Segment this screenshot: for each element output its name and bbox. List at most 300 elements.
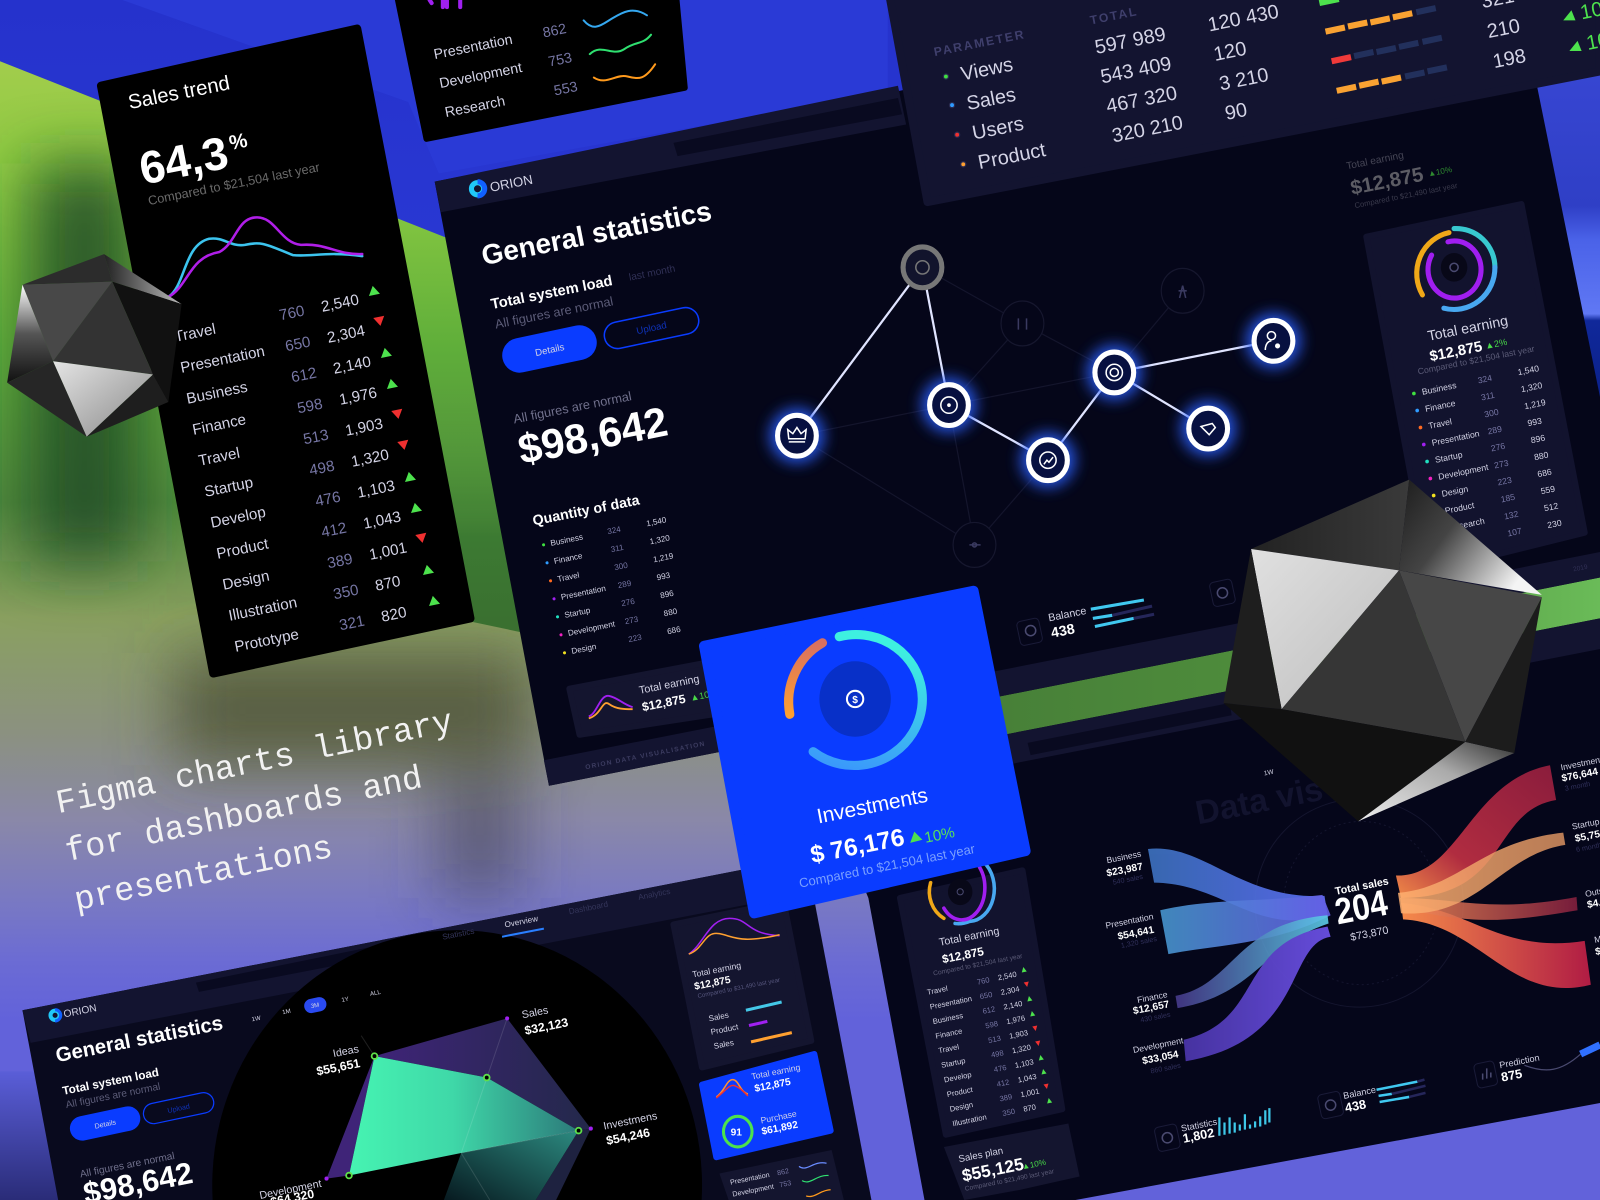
note: All figures are normal bbox=[494, 293, 614, 332]
table: 1,103 bbox=[356, 477, 396, 502]
table: Business bbox=[932, 1011, 964, 1026]
subheading: Total system load bbox=[61, 1066, 160, 1098]
table: Presentation bbox=[179, 343, 266, 377]
faded nodes bbox=[953, 268, 1204, 567]
sankey left bbox=[1148, 849, 1331, 1061]
footer text: ORION DATA VISUALISATION bbox=[585, 741, 706, 771]
table: Travel bbox=[926, 984, 949, 997]
compared: Compared to $31,490 last year bbox=[697, 977, 781, 1000]
table: Design bbox=[221, 568, 271, 594]
background: right margin bbox=[1520, 61, 1600, 408]
table: 598 bbox=[296, 396, 324, 417]
quantity table: 324 bbox=[607, 525, 622, 536]
table: Startup bbox=[203, 474, 255, 501]
heading: Total earning bbox=[1426, 313, 1509, 345]
table: 1,976 bbox=[338, 384, 378, 409]
table: 412 bbox=[996, 1077, 1010, 1089]
total sales rings bbox=[1255, 799, 1463, 1007]
table: 132 bbox=[1503, 509, 1519, 521]
last month: last month bbox=[628, 264, 676, 284]
legend: Sales bbox=[708, 1011, 730, 1023]
table: 289 bbox=[1487, 424, 1503, 436]
table: Design bbox=[1441, 484, 1469, 499]
label: Investments bbox=[815, 784, 930, 828]
gauge: 91 bbox=[731, 1128, 742, 1139]
quantity table: 223 bbox=[628, 633, 643, 644]
table: Business bbox=[1421, 380, 1458, 397]
sankey right bbox=[1396, 765, 1591, 988]
table: 230 bbox=[1546, 518, 1563, 530]
heading quantity: Quantity of data bbox=[531, 492, 642, 529]
top bar bbox=[22, 870, 747, 1043]
note 2: All figures are normal bbox=[79, 1151, 176, 1180]
top bar bbox=[435, 86, 906, 212]
total sales: $73,870 bbox=[1349, 924, 1390, 944]
deltas bbox=[1563, 0, 1600, 55]
polyhedron: right bbox=[1223, 480, 1542, 821]
tabs: Overview bbox=[504, 914, 539, 930]
table: 612 bbox=[982, 1004, 996, 1016]
amount: $12,875 bbox=[941, 945, 985, 966]
footer year: 2019 bbox=[1573, 564, 1589, 573]
faded total earning: $12,875 bbox=[1349, 164, 1425, 200]
table: 412 bbox=[320, 520, 348, 541]
button upload bbox=[142, 1091, 216, 1126]
table: 559 bbox=[1540, 484, 1556, 496]
line chart bbox=[168, 217, 362, 297]
glows bbox=[769, 313, 1301, 488]
background: dark green facet right of sales panel bbox=[388, 408, 571, 643]
quantity table: 880 bbox=[663, 607, 678, 618]
rows: 320 210 bbox=[1110, 112, 1185, 147]
table: Travel bbox=[173, 321, 217, 346]
rows: Product bbox=[976, 139, 1048, 174]
table: 1,903 bbox=[344, 415, 384, 440]
table: Finance bbox=[1424, 398, 1456, 414]
button upload bbox=[602, 305, 701, 351]
note: All figures are normal bbox=[65, 1082, 161, 1111]
table bbox=[173, 285, 442, 656]
table: Design bbox=[949, 1100, 974, 1114]
table: 1,103 bbox=[1014, 1057, 1034, 1070]
card delta: ▲10% bbox=[689, 688, 718, 703]
panel: sales trend bbox=[101, 29, 470, 673]
sankey labels left: 1,320 sales bbox=[1120, 935, 1158, 950]
percent sign: % bbox=[227, 130, 249, 155]
amount: $12,875 bbox=[693, 975, 732, 993]
sankey labels left: $33,054 bbox=[1141, 1049, 1180, 1067]
background: lighter facet bbox=[122, 0, 888, 173]
rows: Presentation bbox=[729, 1171, 770, 1187]
table: 321 bbox=[338, 613, 366, 634]
headline: for dashboards and bbox=[62, 760, 426, 872]
text: Total earning bbox=[751, 1062, 801, 1082]
1W tab: 1W bbox=[1263, 769, 1275, 777]
statistics widget bbox=[1154, 1108, 1269, 1152]
column header total: TOTAL bbox=[1089, 4, 1139, 27]
quantity table: 1,540 bbox=[645, 515, 668, 528]
quantity table: 993 bbox=[656, 571, 671, 582]
active edges bbox=[797, 267, 1273, 460]
rows: 753 bbox=[779, 1179, 792, 1189]
table: 476 bbox=[993, 1063, 1007, 1074]
table: Research bbox=[1447, 516, 1486, 533]
sankey labels left: $54,641 bbox=[1117, 925, 1155, 943]
legend: Product bbox=[710, 1022, 740, 1037]
purchase amount: $61,892 bbox=[761, 1120, 799, 1138]
faded edges bbox=[797, 267, 1183, 545]
sankey labels left: 540 sales bbox=[1112, 873, 1144, 887]
table: 1,219 bbox=[1523, 397, 1547, 411]
time tabs: 1W bbox=[251, 1015, 262, 1023]
text: Total earning bbox=[691, 960, 742, 980]
radar labels bbox=[258, 1004, 658, 1200]
table: 896 bbox=[1530, 433, 1546, 445]
table: Product bbox=[215, 535, 271, 563]
quantity table bbox=[541, 515, 689, 658]
node: user bbox=[1254, 320, 1293, 361]
donut: $ bbox=[852, 695, 858, 706]
total earning card bbox=[900, 862, 1062, 1135]
table: 760 bbox=[976, 975, 990, 987]
network graph bbox=[769, 247, 1301, 567]
amount: $55,125 bbox=[960, 1154, 1026, 1186]
table: 1,043 bbox=[1017, 1072, 1037, 1085]
table: Business bbox=[185, 379, 249, 408]
amount: $ 76,176 bbox=[808, 824, 907, 869]
table: 389 bbox=[326, 551, 354, 572]
heading: Total earning bbox=[938, 925, 1000, 949]
quantity table: Development bbox=[567, 619, 616, 638]
headline: Figma charts library bbox=[53, 704, 456, 824]
table: 650 bbox=[979, 990, 993, 1001]
table: Presentation bbox=[1431, 428, 1480, 448]
logo bbox=[471, 182, 485, 196]
balance widget: 438 bbox=[1050, 621, 1076, 642]
panel: lower-right dashboard bbox=[816, 618, 1600, 1200]
values: 198 bbox=[1491, 45, 1528, 73]
table: Develop bbox=[209, 504, 267, 532]
table: 760 bbox=[278, 303, 306, 324]
table: 350 bbox=[332, 582, 360, 603]
radar labels: Ideas bbox=[332, 1043, 360, 1060]
sankey labels left: Presentation bbox=[1105, 911, 1154, 931]
time tabs bbox=[252, 990, 381, 1022]
legend: Sales bbox=[713, 1038, 735, 1051]
table: 476 bbox=[314, 489, 342, 510]
panel: main dashboard general statistics bbox=[435, 0, 1600, 786]
table: 389 bbox=[999, 1092, 1013, 1103]
rows: 553 bbox=[553, 79, 579, 99]
tabs: Analytics bbox=[637, 887, 671, 902]
brand: ORION bbox=[489, 172, 534, 195]
rows: 90 bbox=[1223, 99, 1249, 125]
subheading: Total system load bbox=[490, 273, 614, 313]
time tabs: 1Y bbox=[341, 996, 350, 1004]
donut bbox=[929, 862, 994, 924]
comparison: Compared to $21,504 last year bbox=[798, 841, 977, 891]
faded total earning: Total earning bbox=[1345, 150, 1405, 172]
values bbox=[1479, 0, 1528, 73]
table: 870 bbox=[1023, 1102, 1037, 1114]
table: 185 bbox=[1500, 492, 1516, 504]
rows: 467 320 bbox=[1104, 82, 1179, 118]
spark bbox=[716, 1080, 748, 1098]
tabs: Dashboard bbox=[568, 900, 609, 916]
table: Development bbox=[1437, 462, 1490, 482]
rows: Presentation bbox=[432, 32, 514, 63]
node: target bbox=[1095, 352, 1134, 393]
prediction widget: 875 bbox=[1500, 1066, 1523, 1085]
footer bar bbox=[544, 552, 1600, 786]
table: 686 bbox=[1537, 467, 1553, 479]
statistics widget: 1,802 bbox=[1181, 1125, 1215, 1146]
card amount: $12,875 bbox=[641, 692, 687, 714]
quantity table: Finance bbox=[553, 551, 584, 566]
polyhedron: left bbox=[7, 254, 182, 437]
headline bbox=[53, 704, 456, 921]
node: chart bbox=[1029, 440, 1067, 481]
table: 2,304 bbox=[1000, 984, 1021, 997]
small card: total earning bbox=[673, 902, 811, 1067]
prediction widget bbox=[1473, 1045, 1600, 1089]
sankey labels left: $12,657 bbox=[1132, 999, 1171, 1017]
table: 300 bbox=[1483, 407, 1500, 419]
statistics widget: Statistics bbox=[1180, 1117, 1218, 1134]
rows: 862 bbox=[776, 1167, 790, 1177]
sparks bbox=[799, 1163, 831, 1197]
table: Finance bbox=[935, 1026, 963, 1041]
delta: ▲2% bbox=[1484, 337, 1508, 351]
quantity table: 289 bbox=[617, 579, 633, 590]
table: 1,976 bbox=[1006, 1014, 1026, 1026]
faded icons bbox=[969, 286, 1187, 547]
heading: General statistics bbox=[54, 1012, 225, 1067]
faded total earning: ▲10% bbox=[1427, 165, 1453, 178]
delta arrow bbox=[910, 832, 922, 843]
faded total earning: Compared to $21,490 last year bbox=[1354, 181, 1459, 210]
table: Startup bbox=[1434, 449, 1463, 465]
donut chart bbox=[1417, 229, 1495, 309]
table: Presentation bbox=[929, 994, 973, 1011]
button details bbox=[70, 1106, 140, 1141]
sankey labels right: Startup bbox=[1571, 816, 1600, 832]
headline: presentations bbox=[71, 830, 336, 921]
total earning card bbox=[569, 661, 727, 735]
search field bbox=[673, 98, 902, 156]
label: Sales plan bbox=[958, 1146, 1004, 1165]
rows: 753 bbox=[547, 50, 573, 70]
compared: Compared to $21,490 last year bbox=[964, 1168, 1056, 1193]
table: 2,304 bbox=[326, 322, 367, 347]
time tabs: ALL bbox=[369, 989, 382, 998]
radar labels: $32,123 bbox=[523, 1015, 570, 1038]
table: 350 bbox=[1002, 1107, 1016, 1118]
rows: Users bbox=[970, 113, 1026, 145]
top bar bbox=[1008, 618, 1600, 764]
table: Startup bbox=[940, 1056, 966, 1070]
table: 512 bbox=[1543, 501, 1559, 513]
balance widget bbox=[1317, 1080, 1426, 1119]
rows: Research bbox=[444, 93, 507, 121]
table: 223 bbox=[1497, 475, 1513, 487]
table: 1,903 bbox=[1008, 1028, 1029, 1041]
table: 498 bbox=[990, 1048, 1004, 1060]
table: Illustration bbox=[952, 1112, 987, 1128]
sankey labels right bbox=[1560, 754, 1600, 958]
rows: Sales bbox=[965, 84, 1018, 115]
table: 1,320 bbox=[1011, 1043, 1032, 1055]
table: Develop bbox=[943, 1070, 972, 1084]
prediction icon bbox=[1209, 579, 1236, 607]
button upload: Upload bbox=[167, 1102, 191, 1115]
radar labels: $55,651 bbox=[315, 1056, 361, 1078]
table: 2,140 bbox=[332, 353, 372, 378]
black circle bbox=[212, 930, 702, 1200]
rows: 597 989 bbox=[1093, 23, 1168, 59]
faded title: Data vis bbox=[1192, 771, 1326, 832]
heading: sales trend: Sales trend bbox=[126, 72, 232, 114]
table: 1,320 bbox=[1520, 380, 1543, 394]
tabs bbox=[442, 887, 671, 942]
column header parameter: PARAMETER bbox=[933, 27, 1027, 59]
table: 2,540 bbox=[320, 291, 360, 316]
sankey labels left: Business bbox=[1106, 848, 1143, 865]
brand: ORION bbox=[63, 1003, 98, 1020]
purple bars fragment bbox=[430, 0, 460, 7]
radar purple points bbox=[324, 1016, 593, 1181]
rows: Development bbox=[438, 60, 524, 92]
bars bbox=[746, 1002, 792, 1042]
button details: Details bbox=[94, 1118, 117, 1131]
card: investments bbox=[704, 591, 1026, 913]
button details: Details bbox=[534, 342, 566, 359]
rows bbox=[730, 1168, 792, 1196]
quantity table: Design bbox=[571, 642, 597, 656]
table: 612 bbox=[290, 365, 318, 386]
panel: lower-left dashboard bbox=[22, 857, 871, 1200]
table: 273 bbox=[1493, 458, 1510, 470]
table: 598 bbox=[985, 1019, 999, 1030]
background: blurred shadows bbox=[31, 163, 531, 898]
sankey labels left: 860 sales bbox=[1150, 1062, 1182, 1075]
spark bbox=[689, 918, 780, 954]
rows: Development bbox=[732, 1183, 775, 1199]
sparklines bbox=[584, 11, 655, 80]
radar chart bbox=[324, 1016, 593, 1200]
table: Product bbox=[946, 1085, 974, 1099]
radar labels: Investmens bbox=[602, 1110, 658, 1133]
balance widget bbox=[1016, 600, 1154, 646]
button details bbox=[499, 322, 600, 376]
total sales: 204 bbox=[1332, 883, 1391, 933]
sankey labels left: Finance bbox=[1136, 989, 1169, 1005]
table: 870 bbox=[374, 573, 402, 595]
strip: green between dashboards bbox=[918, 571, 1600, 796]
rows: 120 bbox=[1212, 38, 1248, 66]
table: Travel bbox=[938, 1042, 960, 1055]
amount: $12,875 bbox=[754, 1077, 792, 1095]
node: diamond bbox=[1189, 408, 1228, 449]
small card: sparklines bbox=[719, 1150, 844, 1200]
rows: 862 bbox=[541, 21, 568, 41]
small card: blue bbox=[702, 1054, 831, 1157]
quantity table: 276 bbox=[621, 597, 636, 608]
table: 2,140 bbox=[1003, 999, 1023, 1012]
table: 498 bbox=[308, 458, 336, 479]
balance widget: Balance bbox=[1047, 605, 1088, 624]
table bbox=[926, 966, 1053, 1128]
sankey labels right: 3 month bbox=[1564, 780, 1591, 793]
balance widget: 438 bbox=[1344, 1096, 1367, 1115]
button upload: Upload bbox=[635, 320, 668, 337]
purchase: Purchase bbox=[760, 1108, 798, 1125]
background: lower-left shade bbox=[0, 1071, 61, 1200]
node: crown bbox=[778, 415, 816, 456]
panel: top small sparklines bbox=[396, 0, 685, 139]
values: 210 bbox=[1485, 15, 1522, 43]
table: 993 bbox=[1527, 416, 1543, 428]
rows: Views bbox=[959, 54, 1015, 86]
quantity table: 1,219 bbox=[652, 551, 675, 564]
quantity table: 311 bbox=[610, 543, 625, 554]
panel: parameter table bbox=[885, 0, 1600, 202]
legend bbox=[708, 1014, 739, 1049]
logo bbox=[51, 1010, 61, 1021]
faded total earning bbox=[1345, 150, 1459, 210]
table: Prototype bbox=[233, 626, 300, 656]
big amount: $98,642 bbox=[514, 398, 671, 473]
radar labels: $54,246 bbox=[605, 1125, 651, 1148]
segment bars bbox=[1319, 0, 1447, 91]
search bbox=[1028, 703, 1232, 755]
legend dots bbox=[943, 74, 966, 167]
heading: General statistics bbox=[479, 195, 714, 271]
delta: ▲10% bbox=[1021, 1158, 1047, 1171]
sankey labels left: $23,987 bbox=[1106, 861, 1144, 879]
comparison: Compared to $21,504 last year bbox=[147, 159, 322, 208]
table: 2,540 bbox=[997, 970, 1017, 982]
panel: right total earning bbox=[1366, 204, 1585, 571]
tabs: Statistics bbox=[442, 927, 475, 942]
prediction widget: Prediction bbox=[1498, 1053, 1540, 1070]
table: 820 bbox=[380, 604, 408, 626]
table: 324 bbox=[1477, 373, 1493, 385]
mini chart bbox=[589, 696, 633, 718]
quantity table: 686 bbox=[666, 625, 682, 636]
note 2: All figures are normal bbox=[512, 388, 633, 426]
node: dot bbox=[930, 385, 968, 426]
quantity table: 273 bbox=[624, 615, 639, 626]
sankey labels left: Development bbox=[1132, 1035, 1185, 1055]
sales plan card bbox=[944, 1123, 1080, 1200]
node: top grey bbox=[903, 247, 942, 288]
card text: Total earning bbox=[638, 673, 700, 697]
table: 1,001 bbox=[1020, 1087, 1040, 1099]
rows: 120 430 bbox=[1206, 1, 1281, 36]
table: Travel bbox=[197, 445, 241, 470]
total sales: Total sales bbox=[1334, 875, 1390, 898]
sankey labels left: 430 sales bbox=[1140, 1011, 1172, 1024]
table: 650 bbox=[284, 334, 312, 355]
sankey labels left bbox=[1105, 848, 1185, 1075]
comparison: Compared to $21,504 last year bbox=[1417, 343, 1535, 376]
quantity table: 896 bbox=[659, 589, 675, 600]
table bbox=[1411, 363, 1570, 552]
rows bbox=[432, 21, 579, 121]
table: Product bbox=[1444, 500, 1476, 516]
balance widget: Balance bbox=[1342, 1085, 1377, 1101]
